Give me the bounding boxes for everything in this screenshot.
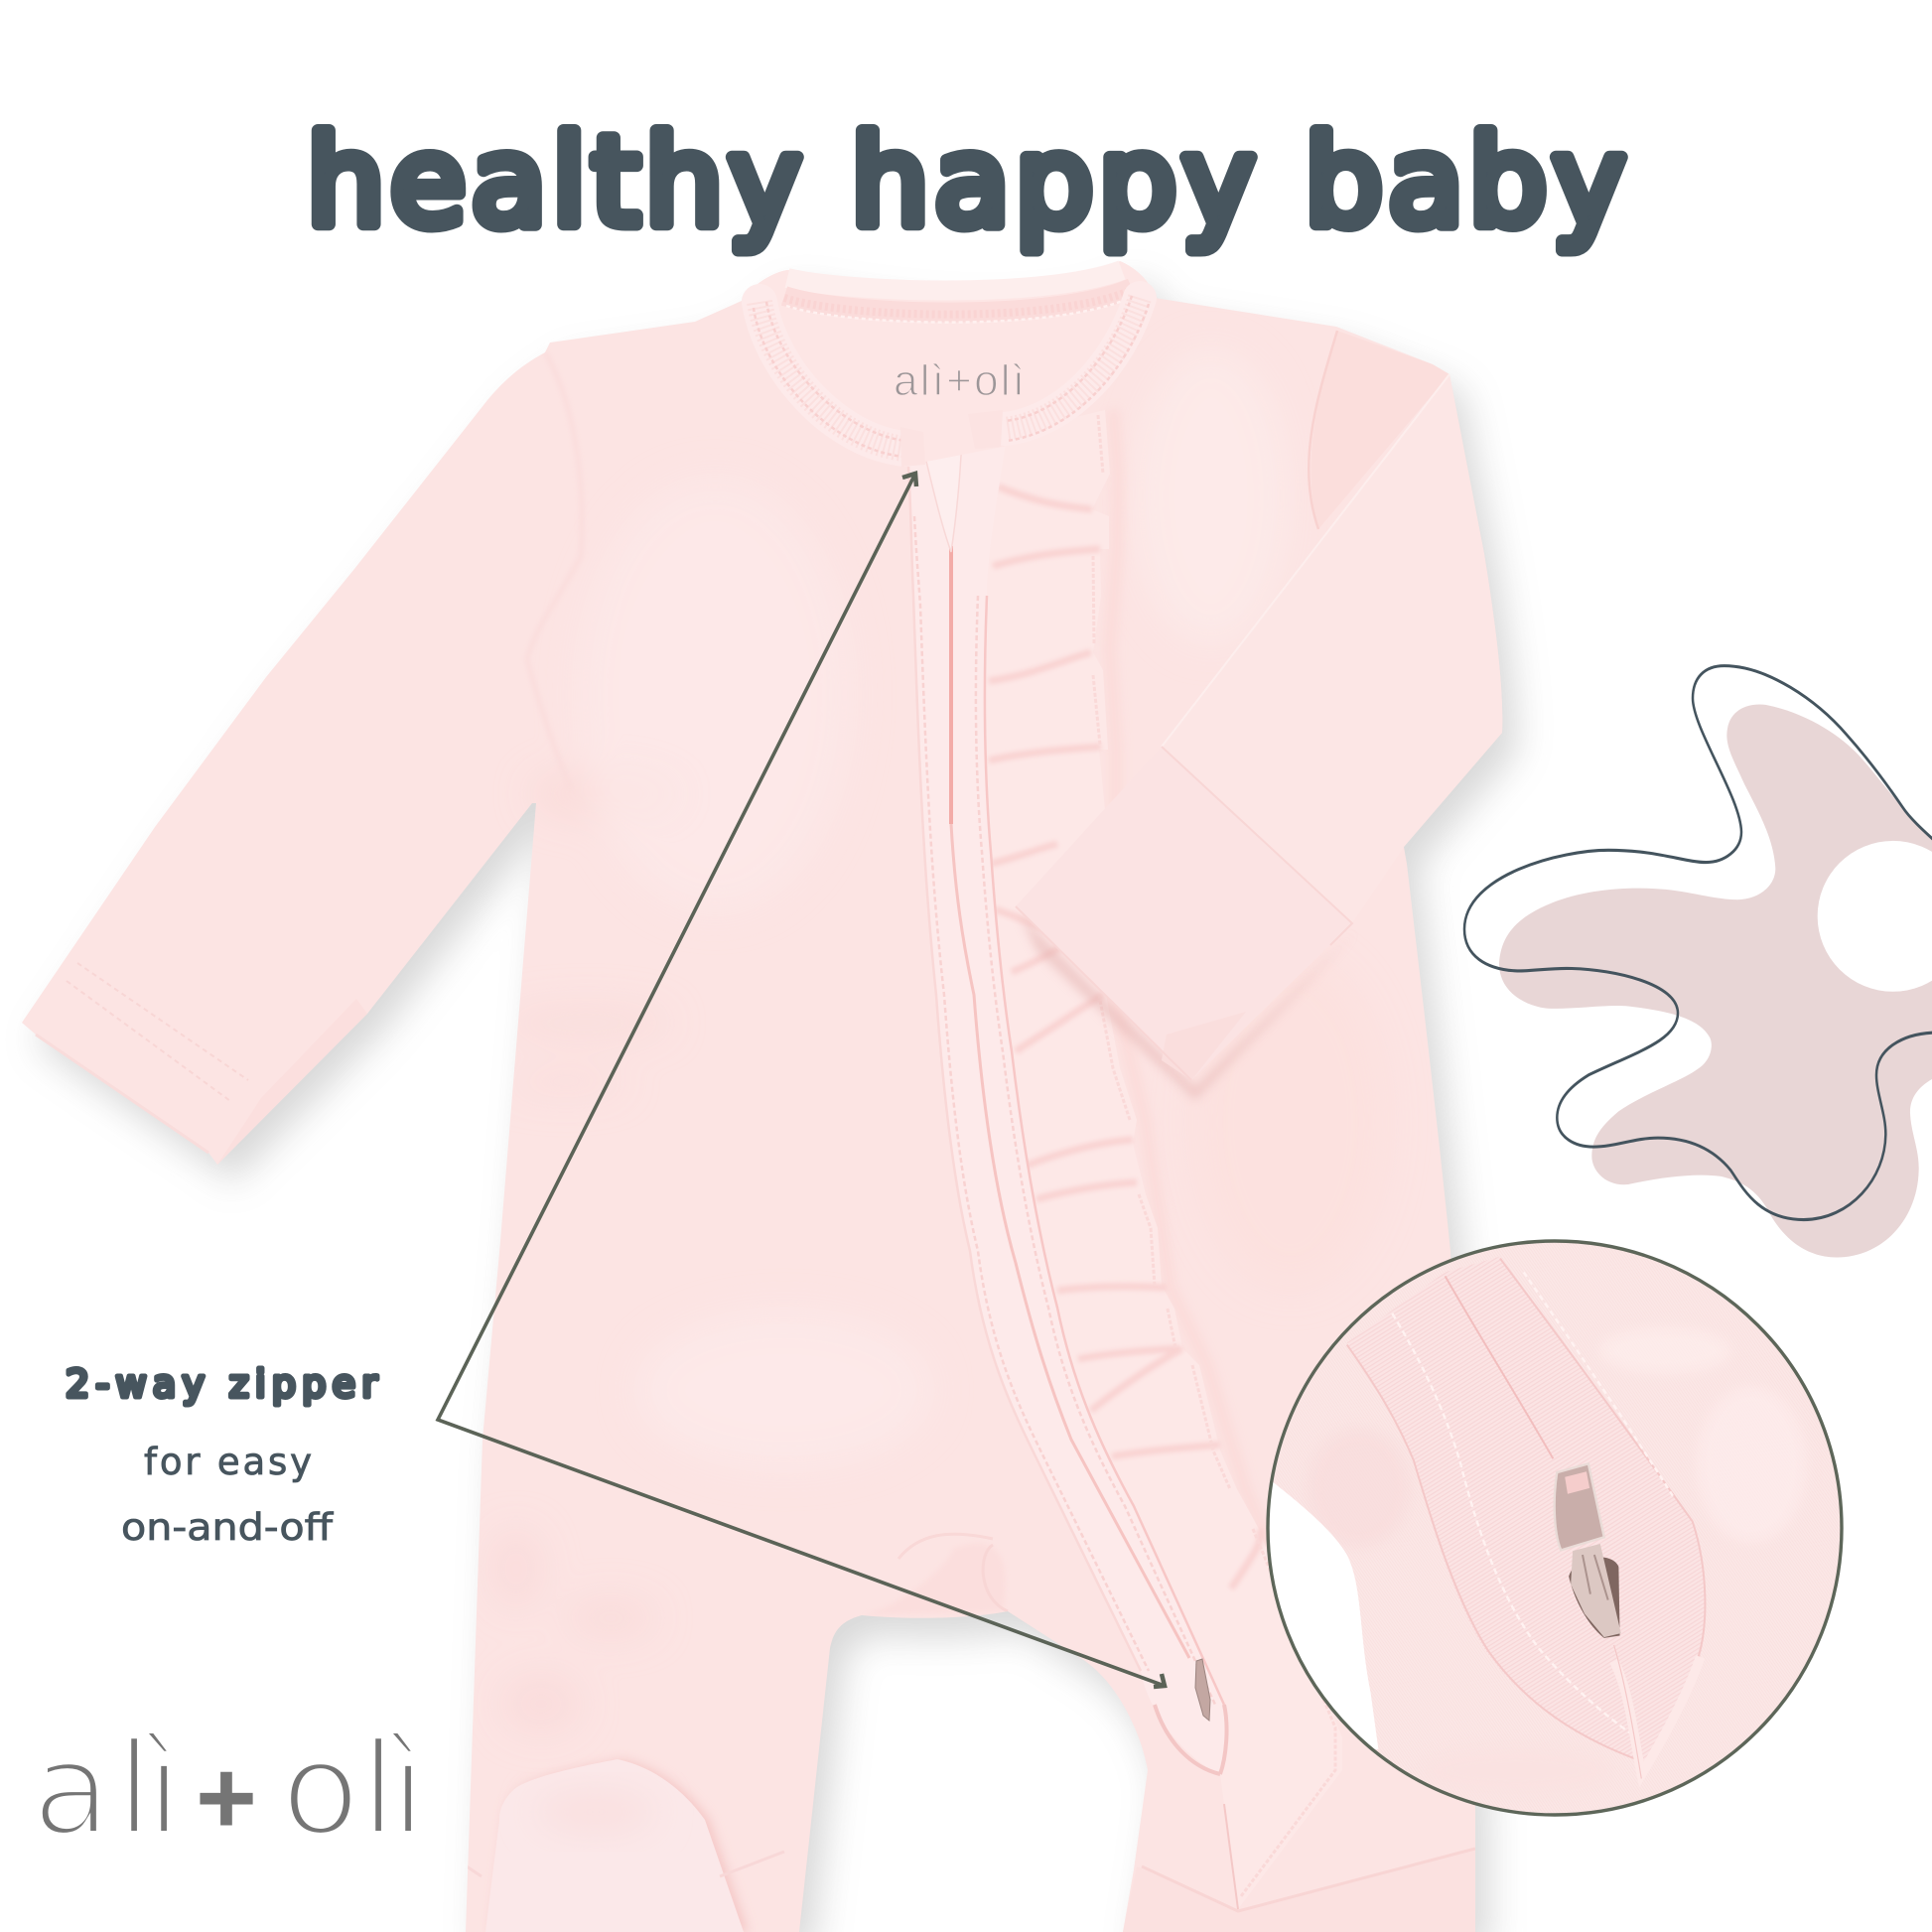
zipper line upper (949, 546, 953, 824)
zipper slider (1571, 1544, 1621, 1637)
brand logo: l (360, 1714, 396, 1864)
callout line 1: for easy (144, 1441, 312, 1483)
left foot pad (485, 1759, 744, 1932)
decorative blob outline (1464, 666, 1932, 1220)
placket edges and stitching (908, 467, 1224, 1705)
left foot pad shadow (523, 1757, 749, 1932)
zipper opening (1569, 1557, 1620, 1638)
romper body and sleeves (22, 261, 1502, 1932)
ruffle hem stitching (1093, 415, 1335, 1896)
brand logo: ì (142, 1714, 182, 1864)
front collar left (759, 302, 905, 449)
brand logo: ì (386, 1714, 426, 1864)
callout leader arrows (438, 474, 1165, 1687)
back collar outer edge (787, 270, 1122, 290)
zipper pull tab (1555, 1463, 1604, 1550)
tab hole (1565, 1471, 1589, 1494)
zipper placket (900, 407, 1227, 1774)
back collar band (784, 288, 1132, 313)
decorative pink blob (1499, 705, 1932, 1258)
right foot (1123, 1849, 1475, 1932)
fabric shading (490, 347, 1390, 1733)
garment drop shadow (36, 281, 1516, 1932)
band seams (1446, 1276, 1553, 1458)
arrowhead: top (902, 474, 916, 486)
collar (742, 261, 1155, 467)
callout heading: 2-way zipper (66, 1362, 377, 1406)
small zipper pull on romper (1195, 1659, 1210, 1721)
brand logo: a (32, 1714, 111, 1864)
callout text: 2-way zipper (66, 1362, 377, 1549)
crotch fold (862, 1544, 1006, 1615)
lower zipper end (1155, 1705, 1227, 1774)
ruffle shadow (1110, 410, 1289, 1588)
collar label text: alì+olì (894, 356, 1025, 405)
left armhole fold (527, 352, 582, 789)
brand logo: l (116, 1714, 152, 1864)
brand logo: o (281, 1714, 360, 1864)
magnified zipper detail circle (1257, 1237, 1846, 1818)
collar tabs (900, 427, 925, 467)
circle border (1268, 1241, 1842, 1815)
white background wedge (1269, 1482, 1378, 1749)
brand logo (32, 1714, 426, 1864)
left sleeve hem (36, 963, 367, 1165)
inner neck (742, 261, 1155, 467)
right armhole shading (1311, 331, 1449, 529)
arrowhead: bottom (1154, 1674, 1165, 1687)
callout line 2: on-and-off (121, 1506, 335, 1549)
front collar right (1005, 298, 1140, 429)
ribbed zipper band (1347, 1257, 1706, 1778)
detail fabric (1265, 1237, 1846, 1818)
title: healthy happy baby (307, 111, 1625, 254)
ruffle folds (989, 486, 1261, 1588)
zipper line lower (951, 824, 1189, 1658)
pink footed romper (22, 261, 1502, 1932)
right sleeve over body (1162, 374, 1502, 923)
open zipper flap (913, 409, 963, 552)
ruffle (985, 410, 1342, 1909)
brand logo: + (196, 1739, 257, 1857)
folded sleeve cuff (1016, 747, 1356, 1100)
